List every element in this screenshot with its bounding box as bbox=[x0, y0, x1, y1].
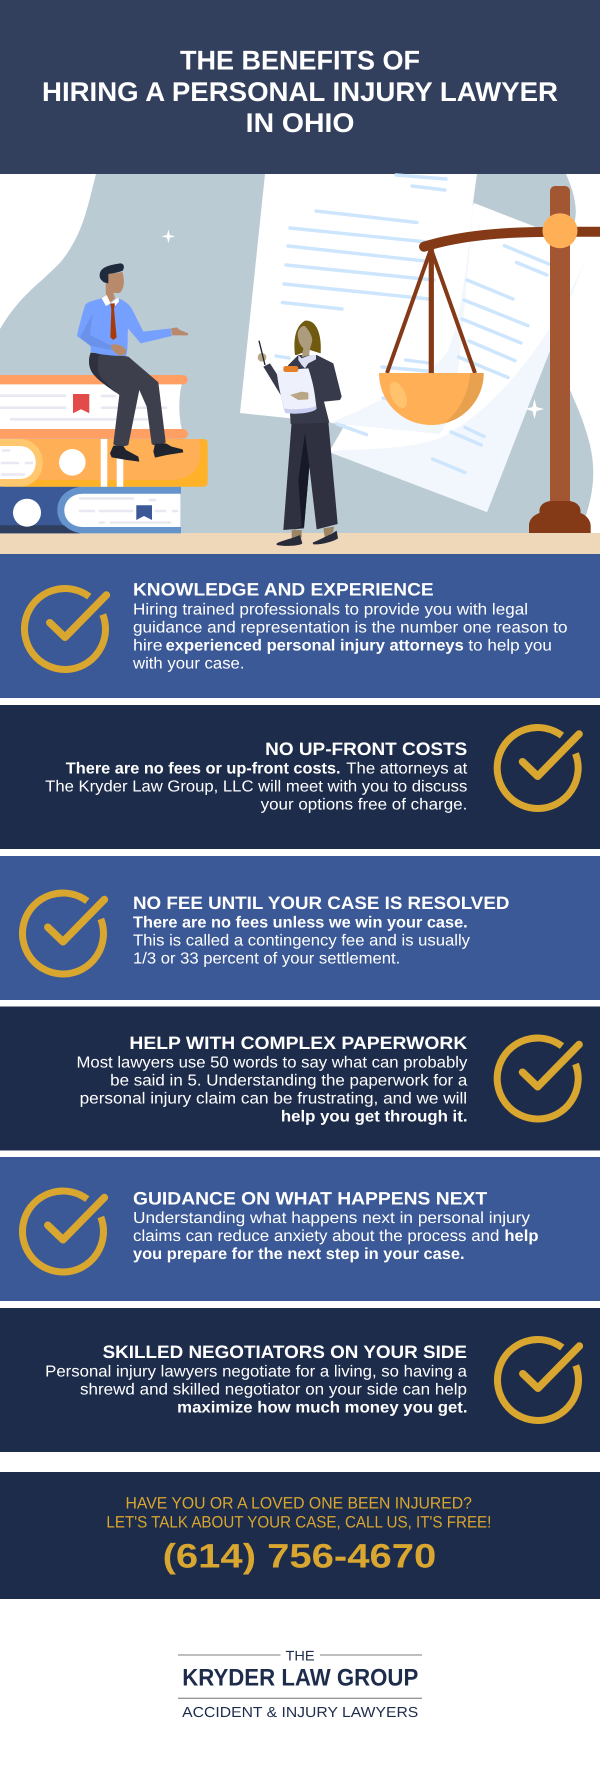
panel: no fee until your case is resolved bbox=[0, 856, 600, 1000]
logo: ACCIDENT & INJURY LAWYERS bbox=[182, 1705, 418, 1721]
body text bbox=[133, 1210, 539, 1263]
scale pan bbox=[379, 373, 484, 425]
panel: call to action bbox=[0, 1472, 600, 1599]
man sitting on books bbox=[77, 263, 188, 462]
title bbox=[42, 46, 558, 138]
orange book bbox=[0, 439, 208, 487]
panel: skilled negotiators on your side bbox=[0, 1308, 600, 1452]
woman face bbox=[298, 326, 312, 357]
woman shoes bbox=[277, 531, 338, 546]
man hands bbox=[111, 327, 188, 355]
logo: THE bbox=[286, 1647, 315, 1663]
top book bbox=[0, 375, 188, 439]
man hair bbox=[100, 263, 124, 283]
body text: hire bbox=[133, 637, 163, 654]
heading: HELP WITH COMPLEX PAPERWORK bbox=[129, 1033, 467, 1053]
icon: check circle bbox=[497, 1339, 579, 1420]
scale beam bbox=[424, 232, 600, 247]
body text bbox=[133, 914, 470, 967]
woman with clipboard bbox=[258, 321, 342, 546]
icon: check circle bbox=[497, 1038, 579, 1119]
icon: check circle bbox=[22, 1191, 104, 1272]
document text lines bbox=[276, 175, 549, 472]
callout text bbox=[106, 1494, 491, 1531]
icon: check circle bbox=[22, 893, 104, 974]
blue book bbox=[0, 487, 181, 533]
callout text: HAVE YOU OR A LOVED ONE BEEN INJURED? bbox=[126, 1494, 472, 1512]
document sheet back bbox=[329, 203, 590, 512]
woman blouse bbox=[298, 355, 316, 368]
stack of books bbox=[0, 375, 208, 533]
body text: Hiring trained professionals to provide you with legal bbox=[133, 601, 528, 618]
body text: There are no fees or up-front costs. bbox=[66, 760, 341, 777]
logo: KRYDER LAW GROUP bbox=[182, 1664, 418, 1691]
body text: Understanding what happens next in personal injury bbox=[133, 1210, 530, 1227]
scale post bbox=[550, 186, 570, 516]
body text: maximize how much money you get. bbox=[177, 1399, 467, 1416]
icon: check circle bbox=[497, 727, 579, 808]
woman hair bbox=[294, 321, 321, 355]
body text: your options free of charge. bbox=[261, 796, 467, 813]
body text: be said in 5. Understanding the paperwork for a bbox=[110, 1072, 467, 1089]
panel: knowledge and experience bbox=[0, 554, 600, 698]
body text bbox=[132, 601, 568, 672]
body text: There are no fees unless we win your case. bbox=[133, 914, 468, 931]
heading: SKILLED NEGOTIATORS ON YOUR SIDE bbox=[103, 1342, 467, 1362]
body text: The attorneys at bbox=[346, 760, 468, 777]
scale base bbox=[529, 501, 591, 533]
icon: check circle bbox=[24, 588, 106, 669]
body text: help bbox=[504, 1228, 539, 1245]
panel: guidance on what happens next bbox=[0, 1157, 600, 1301]
panel: no up-front costs bbox=[0, 705, 600, 849]
body text: Most lawyers use 50 words to say what can probably bbox=[76, 1054, 467, 1071]
body text bbox=[45, 760, 468, 813]
woman ankles bbox=[292, 527, 334, 539]
body text: This is called a contingency fee and is usually bbox=[133, 932, 470, 949]
title: HIRING A PERSONAL INJURY LAWYER bbox=[42, 77, 558, 107]
heading: GUIDANCE ON WHAT HAPPENS NEXT bbox=[133, 1189, 487, 1209]
title: IN OHIO bbox=[246, 108, 354, 138]
title: THE BENEFITS OF bbox=[180, 46, 420, 76]
callout text: LET'S TALK ABOUT YOUR CASE, CALL US, IT'S FREE! bbox=[106, 1513, 491, 1531]
logo bbox=[178, 1647, 422, 1721]
scale hub bbox=[542, 213, 578, 248]
man trousers bbox=[89, 353, 166, 446]
body text: Personal injury lawyers negotiate for a living, so having a bbox=[45, 1363, 467, 1380]
illustration panel bbox=[0, 174, 600, 554]
body text: help you get through it. bbox=[281, 1108, 468, 1125]
man neck and face bbox=[106, 272, 124, 303]
body text bbox=[45, 1363, 467, 1416]
man shirt bbox=[77, 298, 172, 356]
body text: to help you bbox=[468, 637, 552, 654]
body text: 1/3 or 33 percent of your settlement. bbox=[133, 950, 400, 967]
clipboard bbox=[277, 366, 317, 414]
man collar bbox=[102, 295, 119, 306]
background blob bbox=[0, 174, 593, 533]
sparkle right bbox=[525, 399, 544, 419]
body text: experienced personal injury attorneys bbox=[166, 637, 464, 654]
body text: personal injury claim can be frustrating, and we will bbox=[80, 1090, 467, 1107]
woman trousers bbox=[283, 422, 338, 530]
heading: KNOWLEDGE AND EXPERIENCE bbox=[133, 580, 434, 600]
body text: with your case. bbox=[132, 655, 244, 672]
header banner bbox=[0, 0, 600, 174]
body text: The Kryder Law Group, LLC will meet with you to discuss bbox=[45, 778, 467, 795]
heading: NO FEE UNTIL YOUR CASE IS RESOLVED bbox=[133, 893, 509, 913]
man tie bbox=[110, 303, 117, 340]
panel: help with complex paperwork bbox=[0, 1006, 600, 1150]
man shoes bbox=[110, 443, 183, 462]
floor bbox=[0, 533, 600, 554]
woman jacket bbox=[263, 355, 342, 424]
body text bbox=[76, 1054, 468, 1125]
scale chains bbox=[387, 249, 475, 373]
sparkle left bbox=[162, 230, 175, 243]
phone number: (614) 756-4670 bbox=[163, 1537, 436, 1575]
heading: NO UP-FRONT COSTS bbox=[265, 739, 467, 759]
body text: shrewd and skilled negotiator on your side can help bbox=[80, 1381, 467, 1398]
woman hands and pen bbox=[258, 341, 308, 400]
body text: guidance and representation is the number one reason to bbox=[133, 619, 568, 636]
body text: claims can reduce anxiety about the process and bbox=[133, 1228, 499, 1245]
document sheet front bbox=[240, 174, 477, 434]
body text: you prepare for the next step in your case. bbox=[133, 1246, 465, 1263]
scales of justice bbox=[379, 186, 600, 533]
